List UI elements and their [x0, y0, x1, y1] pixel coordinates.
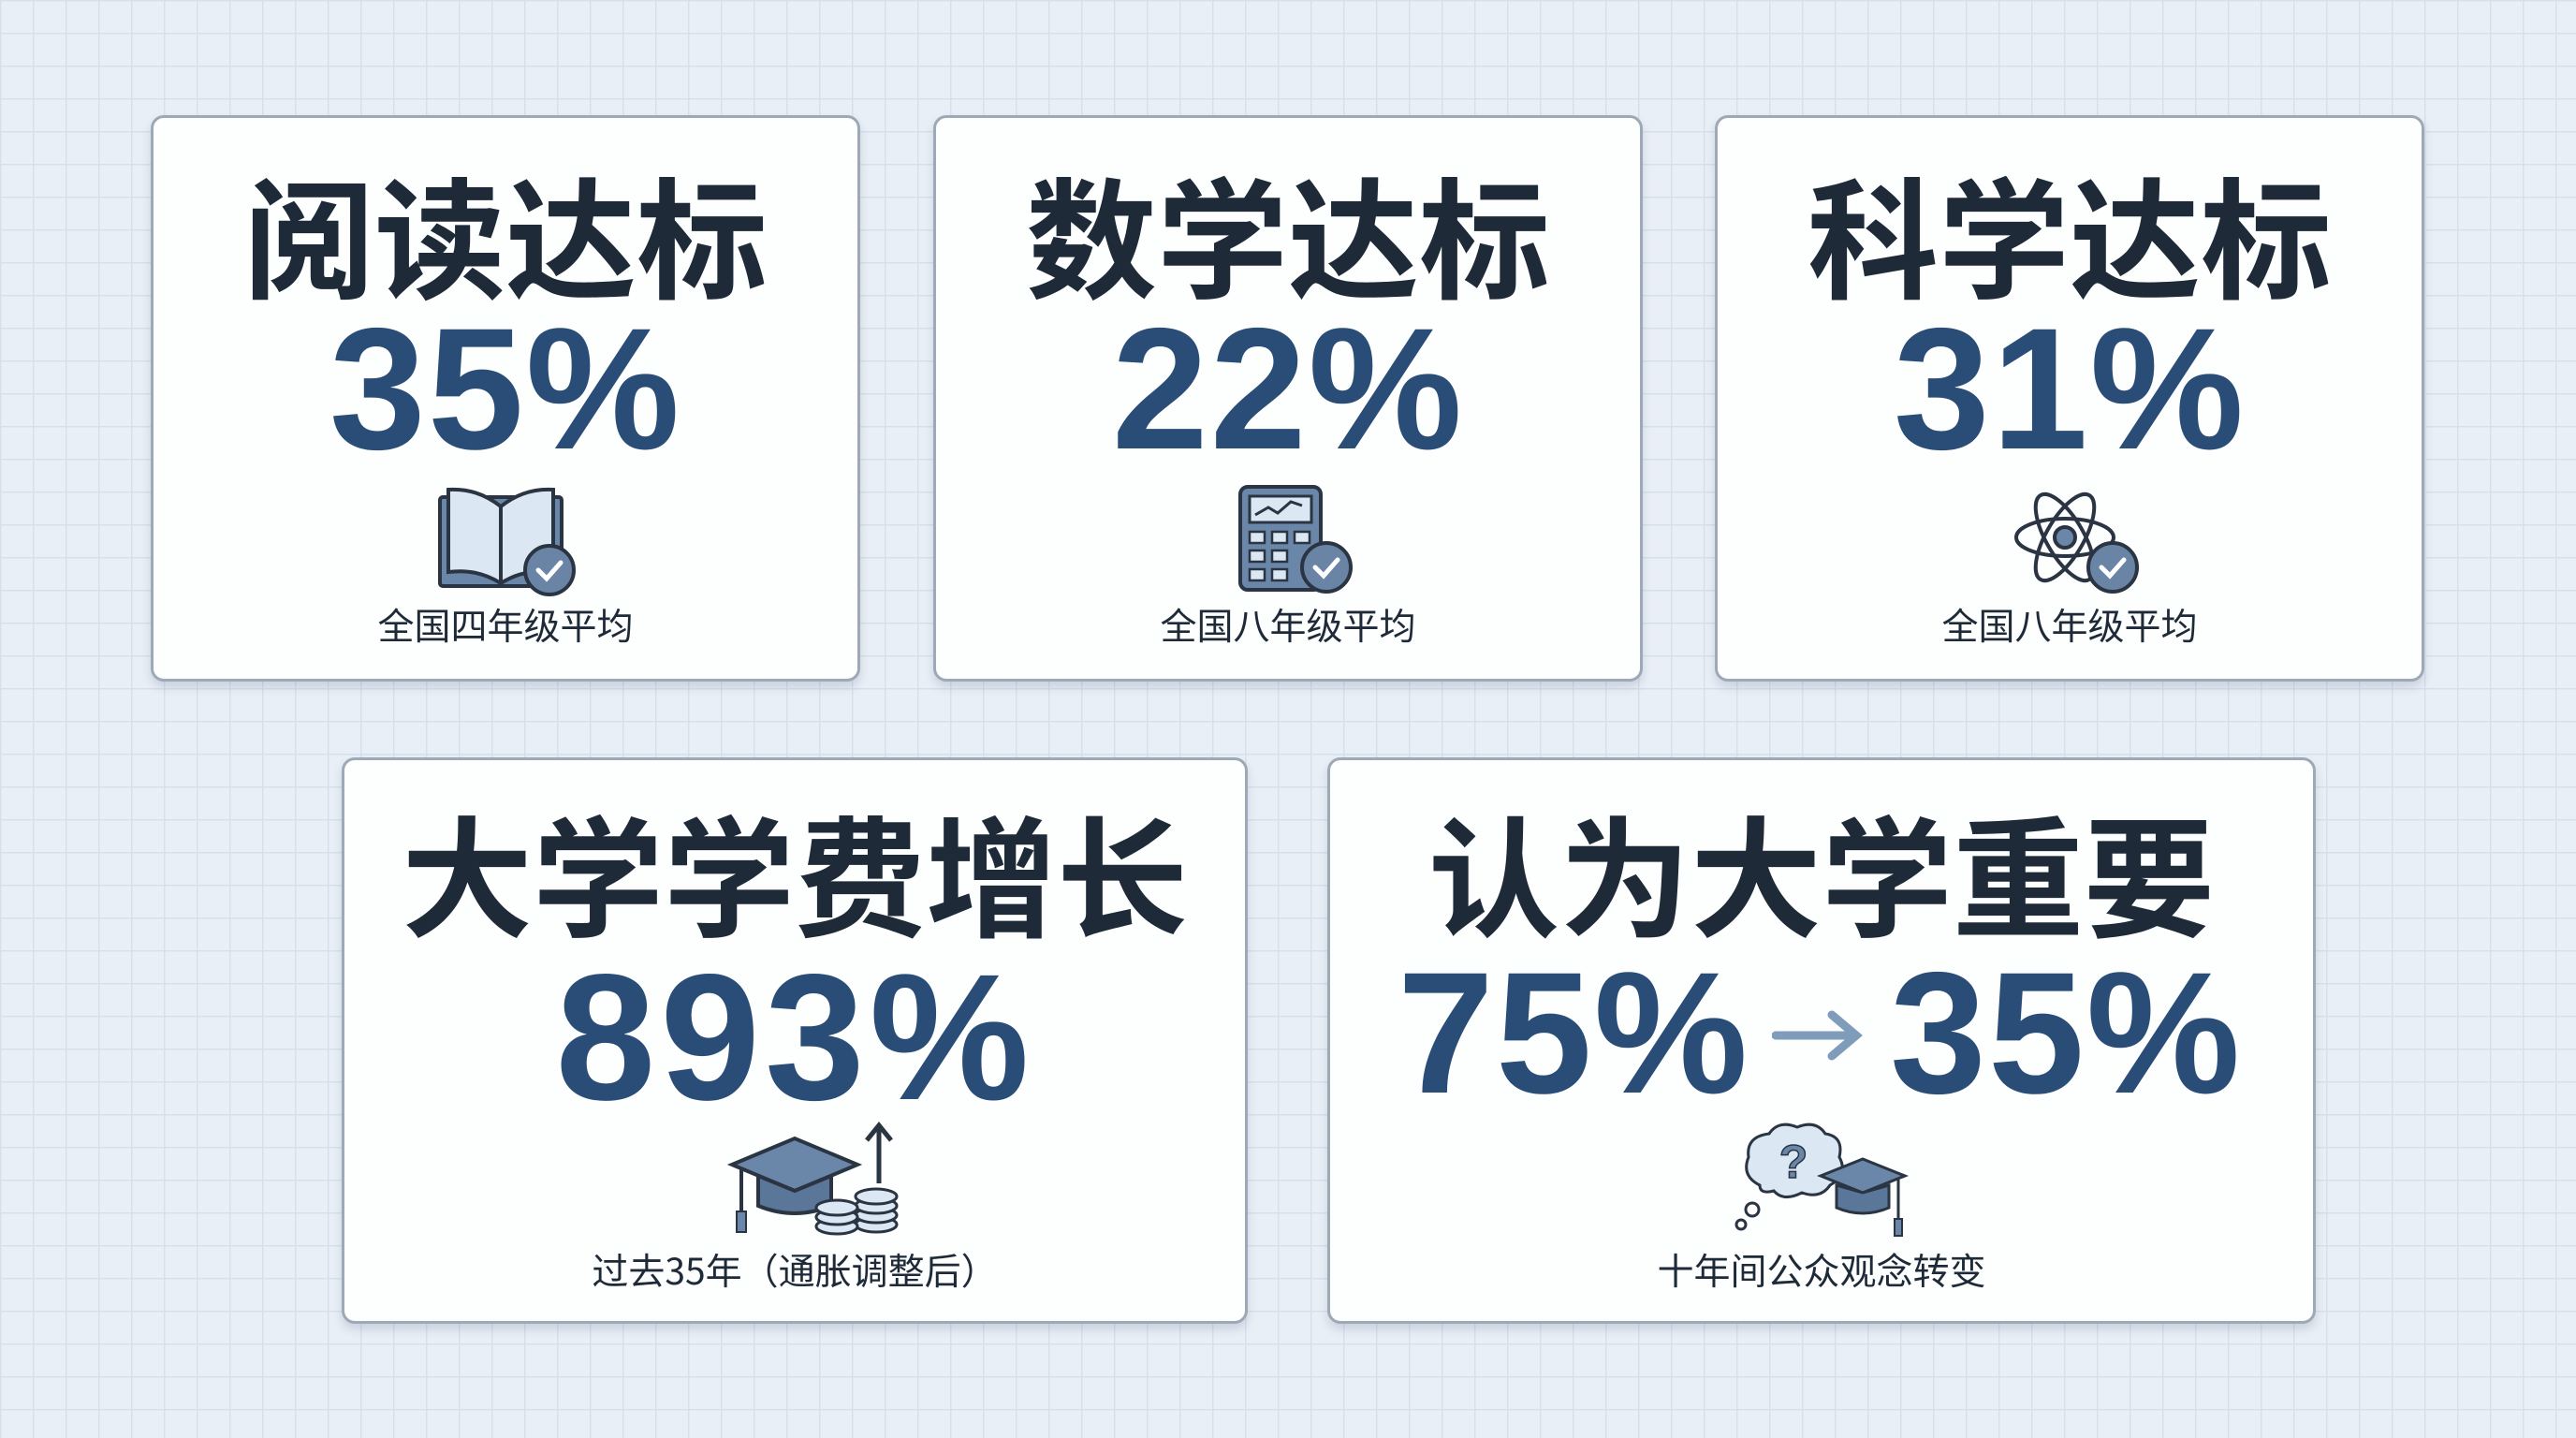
- subtitle: 全国八年级平均: [1160, 598, 1415, 651]
- card: science: [1715, 115, 2424, 682]
- subtitle: 十年间公众观念转变: [1657, 1243, 1986, 1296]
- heading: math: 数学达标: [1026, 138, 1550, 327]
- number: 35%: 35%: [329, 293, 681, 486]
- number: 22%: 22%: [1112, 293, 1464, 486]
- icon: graduation cap with coins: [727, 1122, 899, 1236]
- subtitle: 全国八年级平均: [1941, 598, 2198, 651]
- card: math: [933, 115, 1643, 682]
- icon: book with check: [438, 487, 576, 596]
- number: 893%: 893%: [555, 936, 1034, 1137]
- number: 75%: 75%: [1398, 937, 1749, 1130]
- heading: reading: 阅读达标: [243, 138, 768, 327]
- subtitle: 过去35年（通胀调整后）: [592, 1243, 998, 1296]
- icon: calculator with check: [1238, 485, 1353, 594]
- numbers: 75% to 35%: [1398, 937, 2242, 1130]
- card: reading: [151, 115, 860, 682]
- card: tuition: [342, 757, 1248, 1324]
- heading: perception: 认为大学重要: [1428, 776, 2215, 965]
- number: 35%: 35%: [1890, 937, 2242, 1130]
- subtitle: 全国四年级平均: [377, 598, 633, 651]
- heading: tuition: 大学学费增长: [402, 776, 1188, 965]
- heading: science: 科学达标: [1808, 138, 2332, 327]
- icon: atom with check: [2014, 492, 2139, 594]
- icon: thought cloud and cap: ?: [1779, 1136, 1808, 1188]
- icon: thought cloud and cap: [1735, 1123, 1909, 1237]
- arrow: [1772, 1011, 1863, 1060]
- number: 31%: 31%: [1894, 293, 2246, 486]
- card: perception: [1327, 757, 2316, 1324]
